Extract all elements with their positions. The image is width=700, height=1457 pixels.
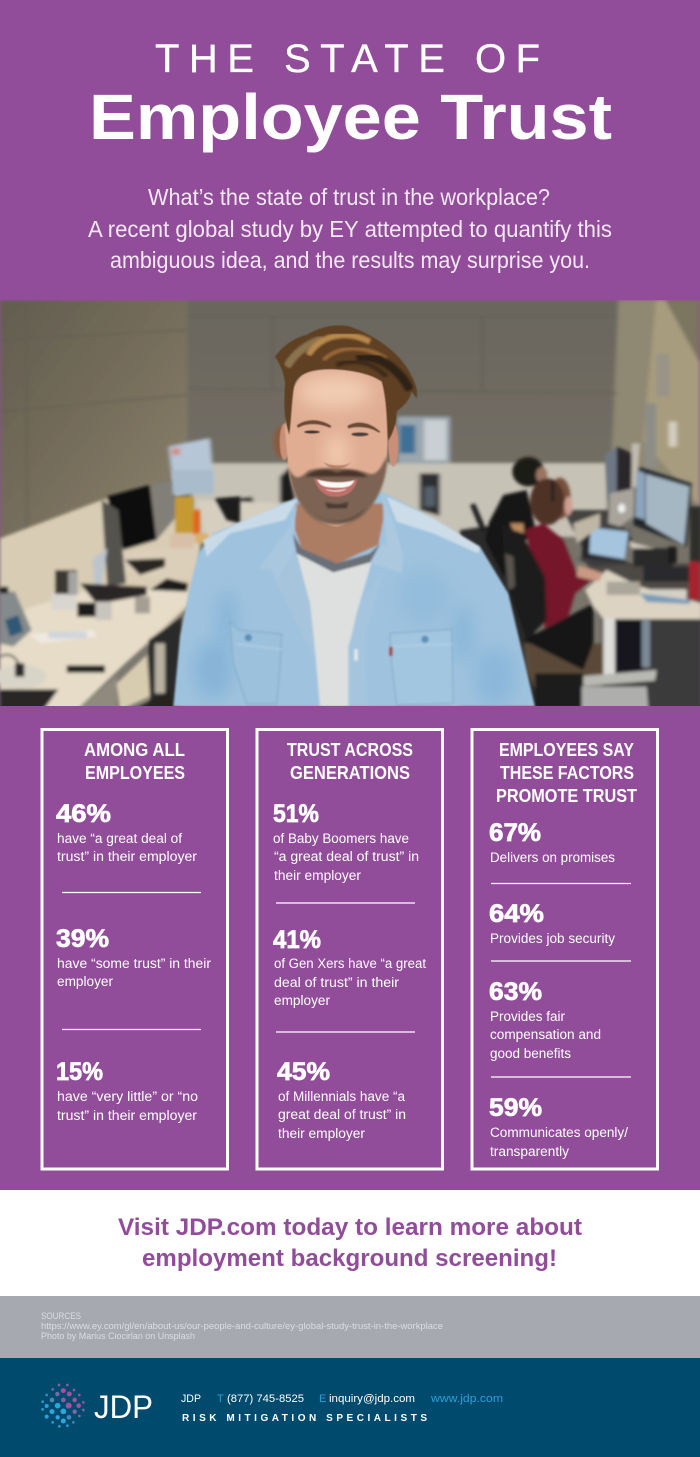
photo: head and hair (275, 325, 417, 527)
stat: 15 percent (56, 1058, 198, 1123)
contact line: inquiry@jdp.com (329, 1393, 415, 1405)
stat: baby boomers 51 percent (273, 800, 419, 883)
photo: left desks (0, 470, 240, 710)
stat: gen x 41 percent: deal of trust” in their (274, 975, 400, 990)
heading: trust across generations: GENERATIONS (290, 762, 410, 783)
stat: 46 percent: have “a great deal of (57, 831, 182, 846)
contact line: E (319, 1393, 326, 1405)
stat: baby boomers 51 percent: of Baby Boomers have (273, 831, 409, 846)
stat: fair compensation 63 percent (489, 978, 601, 1061)
stat: 46 percent (56, 800, 198, 864)
footer band (0, 1358, 700, 1457)
stat: millennials 45 percent: 45% (277, 1058, 330, 1086)
heading: factors that promote trust (496, 739, 638, 806)
sources band: SOURCES (41, 1311, 81, 1321)
photo: denim shirt (173, 492, 535, 707)
contact line: (877) 745-8525 (227, 1393, 304, 1405)
stat: baby boomers 51 percent: 51% (273, 800, 319, 828)
intro text: What’s the state of trust in the workplace? (148, 184, 550, 210)
panel: trust across generations (257, 730, 442, 1169)
stat: fair compensation 63 percent: good benefits (490, 1046, 571, 1061)
contact line (181, 1393, 503, 1405)
stat: baby boomers 51 percent: their employer (274, 868, 362, 883)
icon: JDP dot logo (41, 1384, 85, 1428)
call to action band (0, 1190, 700, 1296)
stat: gen x 41 percent: employer (274, 993, 331, 1008)
stat: gen x 41 percent (273, 926, 426, 1008)
title (89, 37, 612, 153)
stat: delivers on promises 67 percent: Delivers on promises (490, 850, 615, 865)
heading: trust across generations: TRUST ACROSS (287, 739, 413, 760)
stat: millennials 45 percent: of Millennials have “a (278, 1089, 405, 1104)
stat: fair compensation 63 percent: Provides fair (490, 1009, 566, 1024)
stat: baby boomers 51 percent: “a great deal of trust” in (274, 849, 419, 864)
contact line: T (217, 1393, 224, 1405)
stat: millennials 45 percent: their employer (278, 1126, 366, 1141)
stat: 39 percent: 39% (56, 925, 109, 953)
stat: delivers on promises 67 percent (489, 819, 615, 865)
contact line: www.jdp.com (430, 1393, 503, 1405)
call to action band: employment background screening! (142, 1245, 557, 1272)
photo: smiling man in an office (0, 300, 700, 710)
stat: 39 percent (56, 925, 212, 989)
stat: job security 64 percent: 64% (489, 900, 544, 928)
stat: gen x 41 percent: of Gen Xers have “a great (274, 956, 426, 971)
stat: millennials 45 percent (277, 1058, 406, 1141)
intro text (88, 184, 612, 273)
stat: communicates openly 59 percent (489, 1094, 628, 1159)
stat: 46 percent: 46% (56, 800, 111, 828)
contact line: JDP (181, 1393, 201, 1405)
stat: millennials 45 percent: great deal of trust” in (278, 1107, 406, 1122)
stat: gen x 41 percent: 41% (273, 926, 321, 954)
stat: 39 percent: employer (57, 974, 114, 989)
heading: among all employees (84, 739, 185, 783)
intro text: ambiguous idea, and the results may surprise you. (110, 247, 590, 273)
stat: communicates openly 59 percent: Communicates openly/ (490, 1125, 628, 1140)
stat: 15 percent: trust” in their employer (57, 1108, 198, 1123)
stat: communicates openly 59 percent: transparently (490, 1144, 569, 1159)
heading: among all employees: EMPLOYEES (85, 762, 185, 783)
stat: communicates openly 59 percent: 59% (489, 1094, 542, 1122)
sources band: https://www.ey.com/gl/en/about-us/our-people-and-culture/ey-global-study-trust-in-the-workplace (41, 1321, 443, 1331)
stat: 15 percent: 15% (56, 1058, 103, 1086)
stat: job security 64 percent: Provides job security (490, 931, 615, 946)
JDP wordmark: JDP (94, 1389, 153, 1425)
heading: factors that promote trust: THESE FACTORS (500, 762, 634, 783)
call to action band: Visit JDP.com today to learn more about (118, 1214, 582, 1241)
heading: trust across generations (287, 739, 413, 783)
photo: colleagues at desks on the right (460, 443, 700, 708)
stat: fair compensation 63 percent: 63% (489, 978, 542, 1006)
heading: factors that promote trust: EMPLOYEES SAY (499, 739, 635, 760)
stat: delivers on promises 67 percent: 67% (489, 819, 541, 847)
title: Employee Trust (89, 81, 612, 153)
stat: job security 64 percent (489, 900, 615, 946)
stat: fair compensation 63 percent: compensation and (490, 1027, 601, 1042)
heading: factors that promote trust: PROMOTE TRUST (496, 785, 638, 806)
tagline: RISK MITIGATION SPECIALISTS (182, 1413, 427, 1424)
panel: factors that promote trust (472, 730, 658, 1169)
sources band (0, 1296, 700, 1358)
title: THE STATE OF (155, 37, 540, 81)
intro text: A recent global study by EY attempted to quantify this (88, 216, 612, 242)
stat: 15 percent: have “very little” or “no (57, 1089, 198, 1104)
panel: among all employees (42, 730, 228, 1169)
stat: 46 percent: trust” in their employer (57, 849, 198, 864)
heading: among all employees: AMONG ALL (84, 739, 185, 760)
stat: 39 percent: have “some trust” in their (57, 956, 212, 971)
sources band: Photo by Marius Ciocirlan on Unsplash (41, 1331, 195, 1341)
